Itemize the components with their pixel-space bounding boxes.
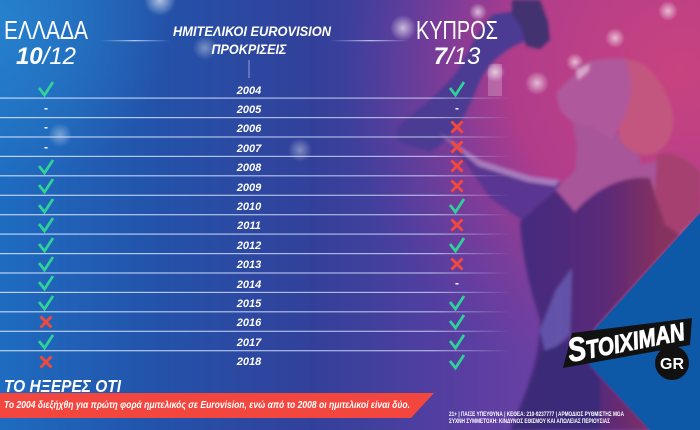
years column: 2012 [236, 240, 261, 252]
legal disclaimer: 21+ | ΠΑΙΞΕ ΥΠΕΥΘΥΝΑ | ΚΕΘΕΑ: 210-9237777 | ΑΡΜΟΔΙΟΣ ΡΥΘΜΙΣΤΗΣ MGA [449, 412, 625, 418]
Cyprus results column: - [455, 276, 459, 290]
years column: 2011 [236, 220, 261, 232]
Greece results column [39, 82, 53, 368]
red fact banner: Το 2004 διεξήχθη για πρώτη φορά ημιτελικός σε Eurovision, ενώ από το 2008 οι ημιτελικοί είναι δύο. [4, 399, 410, 411]
years column: 2006 [236, 123, 262, 135]
heading: Cyprus [416, 15, 498, 70]
brand blue corner [576, 213, 700, 430]
did you know heading: ΤΟ ΗΞΕΡΕΣ ΟΤΙ [4, 376, 122, 396]
raised arm [397, 10, 528, 152]
face [557, 58, 631, 140]
years column: 2008 [236, 162, 262, 174]
years column: 2004 [236, 85, 261, 97]
heading: Greece: ΕΛΛΑΔΑ [4, 15, 89, 45]
years column: 2009 [236, 182, 262, 194]
Stoiximan logo: GR [660, 356, 684, 373]
sequin belt [540, 268, 572, 355]
legal disclaimer [449, 412, 625, 425]
Cyprus results column [450, 82, 464, 368]
years column: 2005 [236, 104, 262, 116]
neck and shoulders [555, 120, 700, 340]
Cyprus results column: - [455, 101, 459, 115]
heading: Cyprus: 7/13 [434, 43, 481, 70]
singer photo silhouette [397, 0, 700, 430]
skirt [510, 340, 600, 430]
legal disclaimer: ΣΥΧΝΗ ΣΥΜΜΕΤΟΧΗ: ΚΙΝΔΥΝΟΣ ΕΘΙΣΜΟΥ ΚΑΙ ΑΠΩΛΕΙΑΣ ΠΕΡΙΟΥΣΙΑΣ [449, 419, 610, 425]
hair [619, 59, 673, 155]
heading: center title [173, 24, 331, 57]
microphone and hand [512, 0, 550, 49]
years column: 2015 [236, 298, 262, 310]
years column: 2013 [236, 259, 261, 271]
heading: Greece: 10/12 [16, 43, 76, 70]
heading: center title: ΗΜΙΤΕΛΙΚΟΙ EUROVISION [173, 24, 331, 39]
Greece results column: - [44, 120, 48, 134]
table row lines [0, 98, 510, 351]
title lines [100, 40, 410, 78]
Greece results column: - [44, 101, 48, 115]
lower arm [438, 132, 565, 225]
years column: 2017 [236, 337, 262, 349]
red fact banner [0, 393, 434, 418]
years column: 2010 [236, 201, 262, 213]
years column: 2007 [236, 143, 262, 155]
Greece results column: - [44, 140, 48, 154]
years column: 2014 [236, 279, 261, 291]
heading: center title: ΠΡΟΚΡΙΣΕΙΣ [212, 42, 287, 57]
heading: Cyprus: ΚΥΠΡΟΣ [416, 15, 498, 45]
heading: Greece [4, 15, 89, 70]
dress [510, 178, 680, 430]
years column: 2016 [236, 317, 262, 329]
years column: 2018 [236, 356, 262, 368]
years column [236, 85, 262, 368]
